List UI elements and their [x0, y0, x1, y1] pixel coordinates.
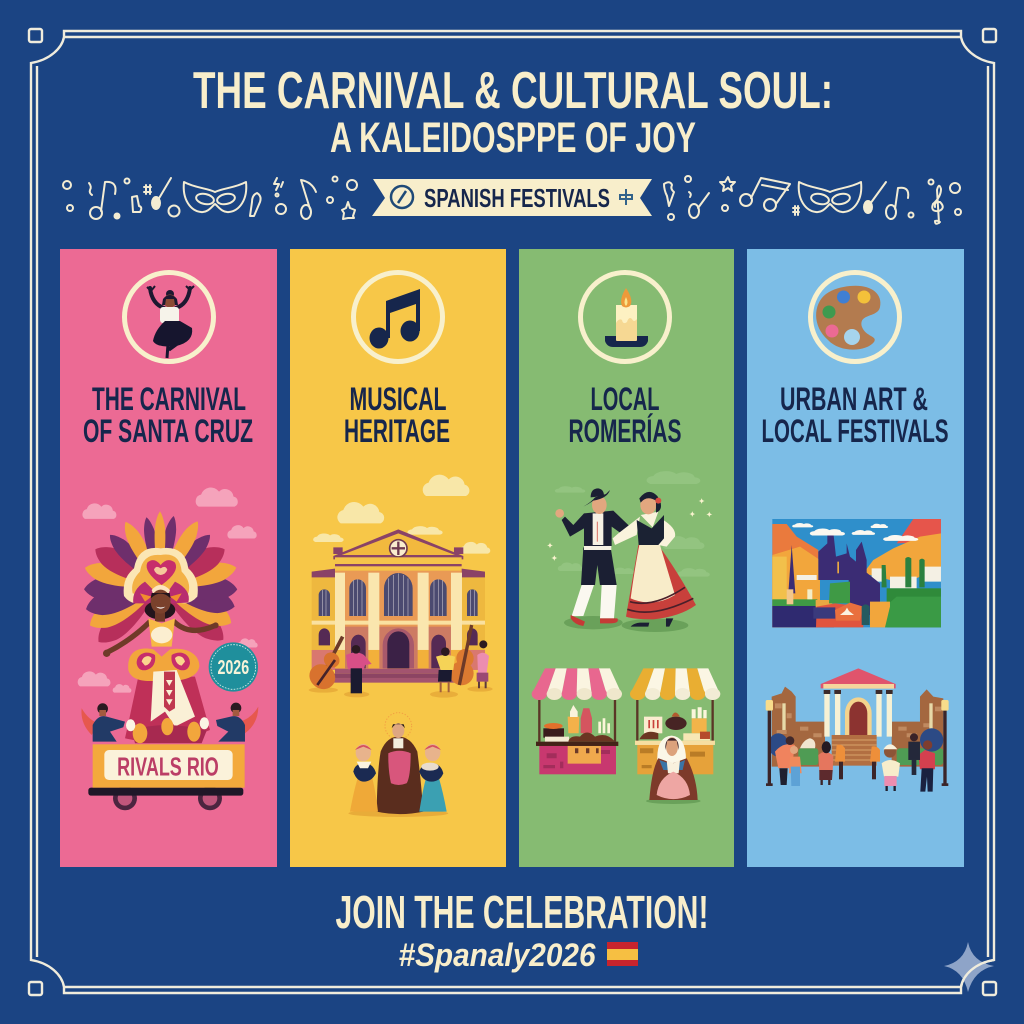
- ribbon banner: SPANISH FESTIVALS: [424, 183, 610, 213]
- panel: urban art and local festivals: [747, 249, 964, 867]
- icon: Spanish flag: [607, 942, 638, 966]
- heading: ROMERÍAS: [568, 413, 682, 449]
- illustration: market stalls: [532, 668, 720, 804]
- illustration: dancing couple: [547, 471, 712, 632]
- icon: candle: [580, 272, 670, 362]
- footer call to action: [336, 886, 708, 973]
- icon: dancer: [124, 272, 214, 362]
- decorative strip: notes and masks left: [63, 176, 357, 219]
- illustration: colourful mural: [772, 519, 941, 627]
- illustration: carnival queen on float: [78, 487, 258, 810]
- heading: [344, 381, 450, 449]
- icon: watermark sparkle: [944, 942, 994, 992]
- decorative strip: notes and masks right: [664, 176, 961, 224]
- heading: [83, 381, 253, 449]
- panel: musical heritage: [290, 249, 506, 867]
- double bass right: [450, 625, 474, 685]
- panel: local romerias: [519, 249, 734, 867]
- title: A KALEIDOSPPE OF JOY: [330, 114, 696, 162]
- heading: HERITAGE: [344, 413, 450, 449]
- heading: MUSICAL: [350, 381, 446, 417]
- panel: carnival of Santa Cruz: [60, 249, 277, 867]
- ribbon banner: [372, 179, 652, 216]
- illustration: carnival queen on float: RIVALS RIO: [117, 751, 219, 781]
- icon: musical notes: [354, 272, 442, 362]
- heading: LOCAL: [590, 381, 660, 417]
- sparkle overlap with frame: [961, 960, 994, 987]
- footer call to action: JOIN THE CELEBRATION!: [336, 886, 708, 938]
- illustration: carnival queen on float: 2026: [217, 657, 249, 679]
- banner icon: [391, 186, 413, 208]
- icon: palette: [810, 272, 900, 362]
- illustration: theatre with musicians: [305, 475, 493, 817]
- heading: OF SANTA CRUZ: [83, 413, 253, 449]
- illustration: pavilion and crowd: [766, 668, 949, 792]
- heading: THE CARNIVAL: [92, 381, 246, 417]
- heading: [762, 381, 948, 449]
- heading: [568, 381, 682, 449]
- heading: URBAN ART &: [780, 381, 928, 417]
- hashtag: #Spanaly2026: [398, 937, 596, 973]
- cello left: [305, 637, 343, 694]
- title: [193, 62, 833, 162]
